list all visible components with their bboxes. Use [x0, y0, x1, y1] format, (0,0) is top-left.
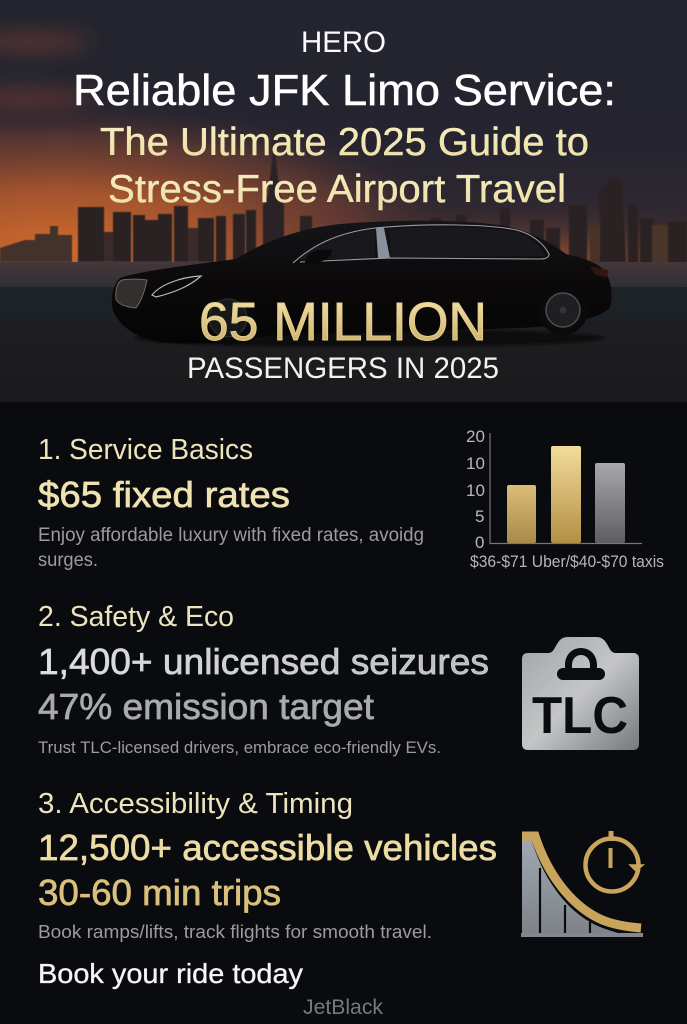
section 1 heading: 1. Service Basics [38, 434, 253, 466]
padlock symbol [557, 648, 605, 680]
section 1: service basics [38, 427, 664, 571]
fixed rates stat: $65 fixed rates [38, 474, 290, 515]
section 3 description: Book ramps/lifts, track flights for smooth travel. [38, 922, 432, 942]
road barrier [0, 287, 687, 319]
y axis labels: 10 [466, 481, 485, 500]
sunset sky [0, 0, 687, 290]
seizures stat: 1,400+ unlicensed seizures [38, 641, 489, 682]
hero title line 1: Reliable JFK Limo Service: [73, 66, 616, 115]
chart dividers [540, 868, 590, 933]
headlight [152, 276, 201, 297]
section 1 description: surges. [38, 550, 98, 571]
bar 3 [595, 463, 625, 543]
car shadow [135, 329, 605, 347]
trip time stat: 30-60 min trips [38, 872, 281, 913]
badge body [522, 637, 639, 750]
door pillar [376, 228, 390, 258]
stopwatch [586, 831, 643, 892]
bay water [0, 262, 687, 290]
hero title line 2: The Ultimate 2025 Guide to [100, 121, 589, 164]
icon: TLC badge [522, 637, 639, 750]
front wheel [201, 291, 255, 345]
limousine [112, 221, 612, 347]
section 1 description: Enjoy affordable luxury with fixed rates, avoidg [38, 525, 424, 546]
wing mirror [305, 250, 332, 264]
gold curve [522, 836, 641, 928]
chart caption: $36-$71 Uber/$40-$70 taxis [470, 552, 664, 571]
grille [116, 279, 147, 308]
dark content panel [0, 402, 687, 1024]
section 3 heading: 3. Accessibility & Timing [38, 788, 353, 820]
y axis labels: 20 [466, 427, 485, 446]
hero panel [0, 0, 687, 402]
y axis labels: 10 [466, 454, 485, 473]
city skyline [0, 120, 687, 265]
windows [300, 227, 546, 260]
TLC label: TLC [532, 687, 628, 745]
curve chart fill [522, 838, 618, 933]
call to action: Book your ride today [38, 958, 303, 989]
section 2 description: Trust TLC-licensed drivers, embrace eco-friendly EVs. [38, 738, 441, 757]
car body [112, 221, 612, 344]
icon: decay curve and stopwatch [521, 831, 643, 937]
road [0, 290, 687, 402]
chart axes [490, 433, 642, 544]
bar 2 [551, 446, 581, 543]
y axis labels [466, 427, 485, 552]
bar 1 [507, 485, 536, 543]
section 2 heading: 2. Safety & Eco [38, 601, 234, 633]
rear wheel [538, 285, 588, 335]
bar chart [466, 427, 664, 571]
tail light [590, 266, 608, 278]
section 2: safety and eco [38, 601, 639, 757]
passenger statistic: 65 MILLION [199, 292, 487, 352]
accessible vehicles stat: 12,500+ accessible vehicles [38, 827, 497, 868]
y axis labels: 5 [475, 507, 484, 526]
chart base [521, 933, 643, 937]
section 1 description [38, 525, 424, 571]
hero title line 3: Stress-Free Airport Travel [108, 168, 566, 211]
window chrome [293, 225, 549, 263]
brand name: JetBlack [303, 996, 383, 1019]
emission stat: 47% emission target [38, 686, 374, 727]
passenger statistic caption: PASSENGERS IN 2025 [187, 352, 499, 385]
section 3: accessibility and timing [38, 788, 643, 942]
hero eyebrow: HERO [301, 26, 386, 59]
y axis labels: 0 [475, 533, 484, 552]
